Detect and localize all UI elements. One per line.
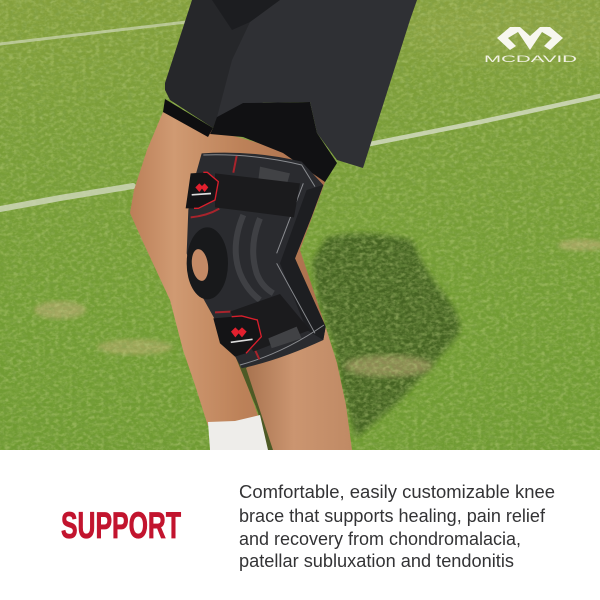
tab label bar (192, 193, 211, 196)
knee brace: body, straps and badges (186, 153, 326, 368)
description text: Comfortable, easily customizable knee (239, 482, 555, 502)
brace body (187, 153, 326, 368)
bottom strap (230, 294, 310, 352)
patella opening (192, 249, 208, 281)
description text: brace that supports healing, pain relief (239, 506, 546, 526)
black left hem band (163, 99, 213, 137)
shadow on grass (312, 233, 460, 438)
white caption band (0, 450, 600, 600)
red accents (191, 156, 259, 359)
gap between the legs (236, 358, 274, 450)
patella pad (187, 227, 228, 299)
McDavid logo (484, 27, 578, 64)
shin (246, 328, 352, 450)
black compression shorts (210, 102, 337, 182)
white stitching (203, 155, 324, 365)
logo mark (497, 27, 563, 50)
mesh windows (258, 166, 290, 182)
shorts pocket shade (212, 0, 280, 30)
leg (130, 112, 352, 450)
bottom mesh window (268, 327, 302, 348)
red edge (232, 316, 261, 353)
white sock (208, 415, 268, 450)
icon: M logo (231, 327, 247, 337)
description text: and recovery from chondromalacia, (239, 529, 521, 549)
darker side panel (280, 185, 326, 340)
top brand tab (186, 172, 218, 208)
spiral stays (236, 215, 273, 300)
bottom brand tab (213, 316, 261, 357)
tab label bar (231, 338, 253, 343)
icon: M logo (195, 183, 208, 192)
grass field (0, 0, 600, 450)
logo wordmark: MCDAVID (484, 54, 578, 64)
top strap (215, 173, 300, 217)
description text: patellar subluxation and tendonitis (239, 551, 514, 571)
thigh, knee and calf (130, 112, 325, 426)
dry grass patch in shadow (344, 355, 432, 377)
red edge (194, 172, 218, 208)
description text (239, 482, 555, 571)
white field line (0, 21, 600, 209)
grey back shorts leg (165, 0, 262, 128)
photo: athlete wearing knee brace on grass field (0, 0, 600, 450)
grey front shorts (217, 0, 417, 168)
heading: SUPPORT: SUPPORT (61, 505, 181, 546)
